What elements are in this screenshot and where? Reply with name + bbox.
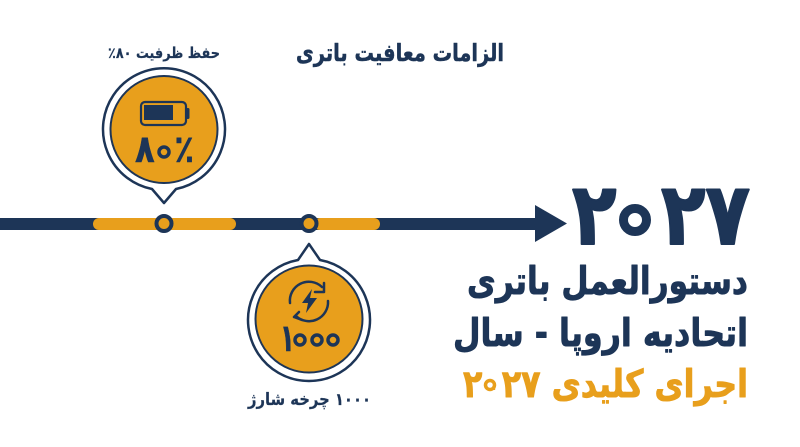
timeline arrow [0,205,567,242]
year 2027: ۲۰۲۷ [572,165,750,265]
label: capacity: حفظ ظرفیت ۸۰٪ [108,44,220,62]
headline line 1: دستورالعمل باتری [467,259,748,303]
icon: charge cycle [290,282,328,321]
label: charge cycles: ۱۰۰۰ چرخه شارژ [247,390,371,410]
timeline marker: 1000 [302,216,316,231]
zero ring [486,380,494,390]
zero rings [295,335,338,345]
pin value: 1000: ۱۰۰۰ [280,316,339,360]
pin value: 80%: ۸۰٪ [135,127,194,171]
zero ring [624,208,646,232]
icon: battery [141,102,190,125]
zero ring [159,147,169,157]
headline line 3: اجرای کلیدی ۲۰۲۷ [463,362,748,406]
section title: الزامات معافیت باتری [296,39,504,67]
headline line 2: اتحادیه اروپا - سال [453,311,748,356]
pin: 80 percent capacity [103,68,225,203]
timeline marker: 80% [156,216,172,231]
pin: 1000 charge cycles [248,244,370,381]
